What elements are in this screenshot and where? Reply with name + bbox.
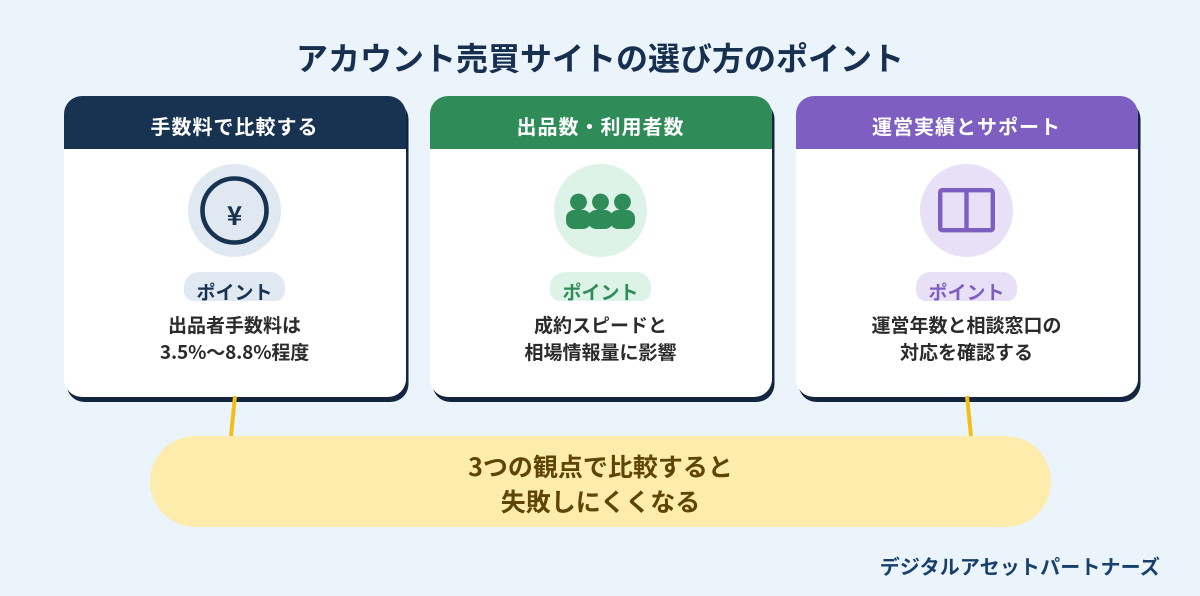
icon: book	[920, 164, 1013, 257]
track record heading: 運営実績とサポート	[872, 111, 1061, 140]
listings point badge	[550, 272, 651, 301]
callout text	[468, 448, 733, 519]
icon: people	[554, 164, 647, 257]
track record text	[871, 311, 1062, 364]
track record heading	[796, 96, 1138, 149]
panel: listings	[430, 96, 772, 397]
listings text: 相場情報量に影響	[524, 338, 676, 364]
listings heading: 出品数・利用者数	[516, 111, 684, 140]
track record text: 運営年数と相談窓口の	[871, 311, 1062, 338]
icon: yen coin: ¥	[227, 196, 242, 233]
listings text: 成約スピードと	[534, 311, 667, 338]
callout text: 3つの観点で比較すると	[468, 448, 733, 484]
fees text	[160, 311, 309, 364]
panel: track record	[796, 96, 1138, 397]
track record point badge	[916, 272, 1017, 301]
fees text: 出品者手数料は	[168, 311, 301, 338]
icon: yen coin	[188, 164, 281, 257]
brand name: デジタルアセットパートナーズ	[880, 551, 1160, 580]
fees heading	[64, 96, 406, 149]
track record text: 対応を確認する	[900, 338, 1033, 364]
fees point badge	[184, 272, 285, 301]
title: アカウント売買サイトの選び方のポイント	[296, 34, 904, 80]
callout	[150, 436, 1051, 527]
fees text: 3.5%〜8.8%程度	[160, 338, 309, 364]
listings text	[524, 311, 676, 364]
listings heading	[430, 96, 772, 149]
callout text: 失敗しにくくなる	[501, 483, 700, 519]
panel: fees	[64, 96, 406, 397]
fees heading: 手数料で比較する	[150, 111, 318, 140]
